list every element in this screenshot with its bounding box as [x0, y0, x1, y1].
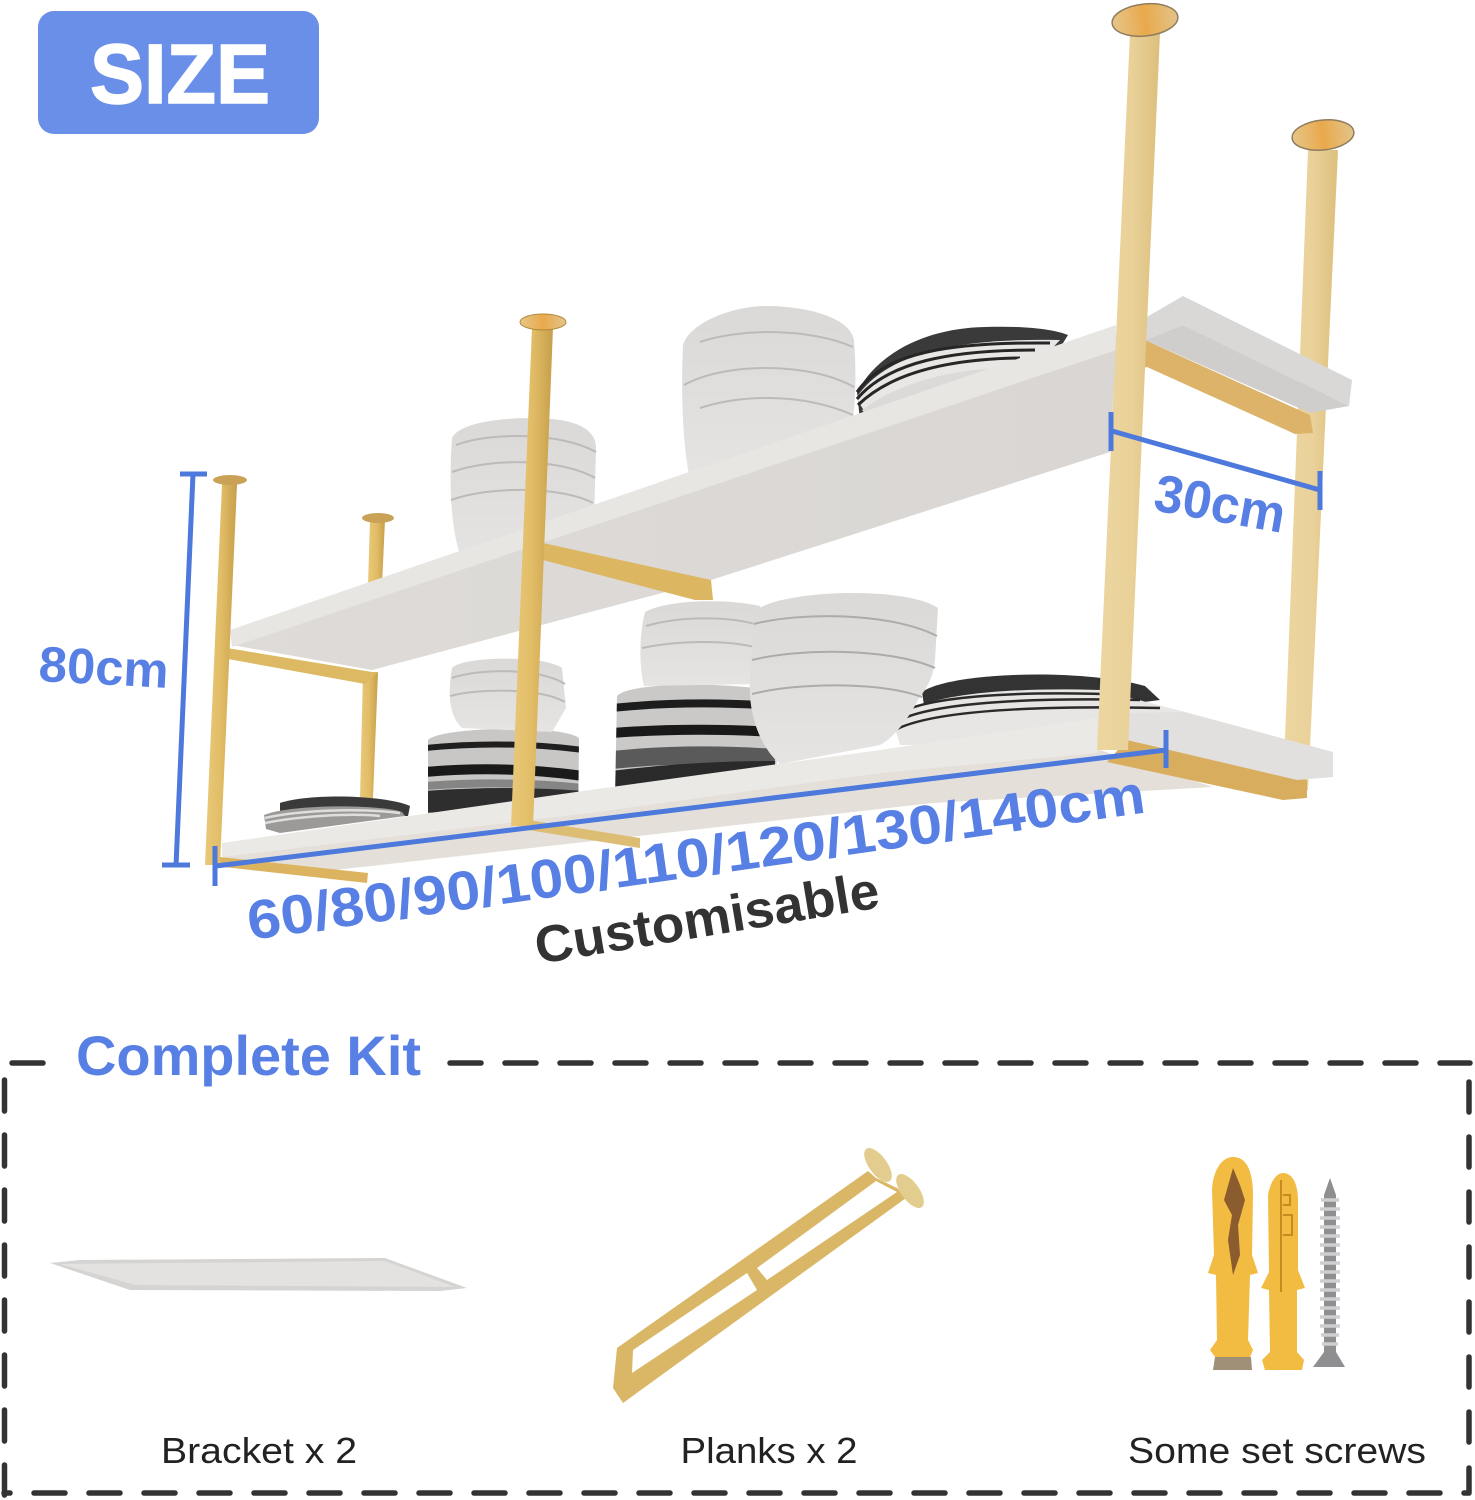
panel: complete kit [4, 1024, 1470, 1495]
dimension: 80cm height [37, 474, 207, 866]
front-middle post [511, 314, 566, 826]
dimension: 30cm depth: 30cm [1150, 464, 1290, 545]
top left bracket arm [227, 648, 378, 684]
top right bracket arm [1136, 322, 1313, 434]
bottom left bracket arm [215, 857, 368, 883]
top plank right end [1145, 296, 1352, 413]
dishes: lower large bowls [750, 593, 938, 764]
back-left post [360, 513, 394, 798]
top middle bracket arm [543, 543, 713, 600]
dishes: top shelf plates [856, 327, 1068, 420]
item: gold bracket [613, 1144, 929, 1403]
label: screws: Some set screws [1128, 1430, 1426, 1471]
bottom plank underside [222, 750, 1213, 872]
bottom middle bracket arm [528, 820, 640, 848]
dishes: top shelf small bowls [451, 418, 596, 560]
silver screw [1313, 1178, 1345, 1367]
badge: SIZE [38, 11, 319, 134]
bottom plank right end [1127, 712, 1333, 780]
dishes: lower striped stack right [615, 685, 777, 786]
back-right post [1283, 117, 1355, 790]
caption: Customisable: Customisable [530, 862, 883, 976]
dishes: lower small bowls [450, 659, 566, 732]
badge: SIZE: SIZE [90, 27, 270, 121]
bottom plank front edge [222, 718, 1097, 857]
dimension: 30cm depth [1111, 412, 1320, 545]
dishes: lower striped stack left [428, 729, 579, 814]
dishes: lower right plates [893, 675, 1185, 745]
label: planks: Planks x 2 [680, 1430, 858, 1471]
dishes: lower flat plates left [264, 797, 410, 833]
top plank [230, 325, 1116, 670]
heading: Complete Kit: Complete Kit [76, 1024, 421, 1087]
bottom right bracket arm [1107, 740, 1307, 800]
small wall anchor [1261, 1173, 1305, 1370]
front-left post [205, 475, 247, 865]
illustration: two-tier gold and white ceiling shelf with dishes [205, 1, 1355, 883]
dimension: width options: 60/80/90/100/110/120/130/140cm [243, 763, 1149, 952]
dishes: lower medium bowls [640, 601, 760, 686]
dashed border [4, 1063, 1470, 1495]
dimension: width options [215, 730, 1166, 952]
label: bracket: Bracket x 2 [161, 1430, 357, 1471]
front-right post [1097, 1, 1179, 750]
item: plank [50, 1258, 467, 1291]
large wall anchor [1208, 1157, 1258, 1370]
dishes: top shelf large bowls [682, 306, 855, 480]
item: screws and anchors [1208, 1157, 1345, 1370]
dimension: 80cm height: 80cm [37, 636, 170, 699]
